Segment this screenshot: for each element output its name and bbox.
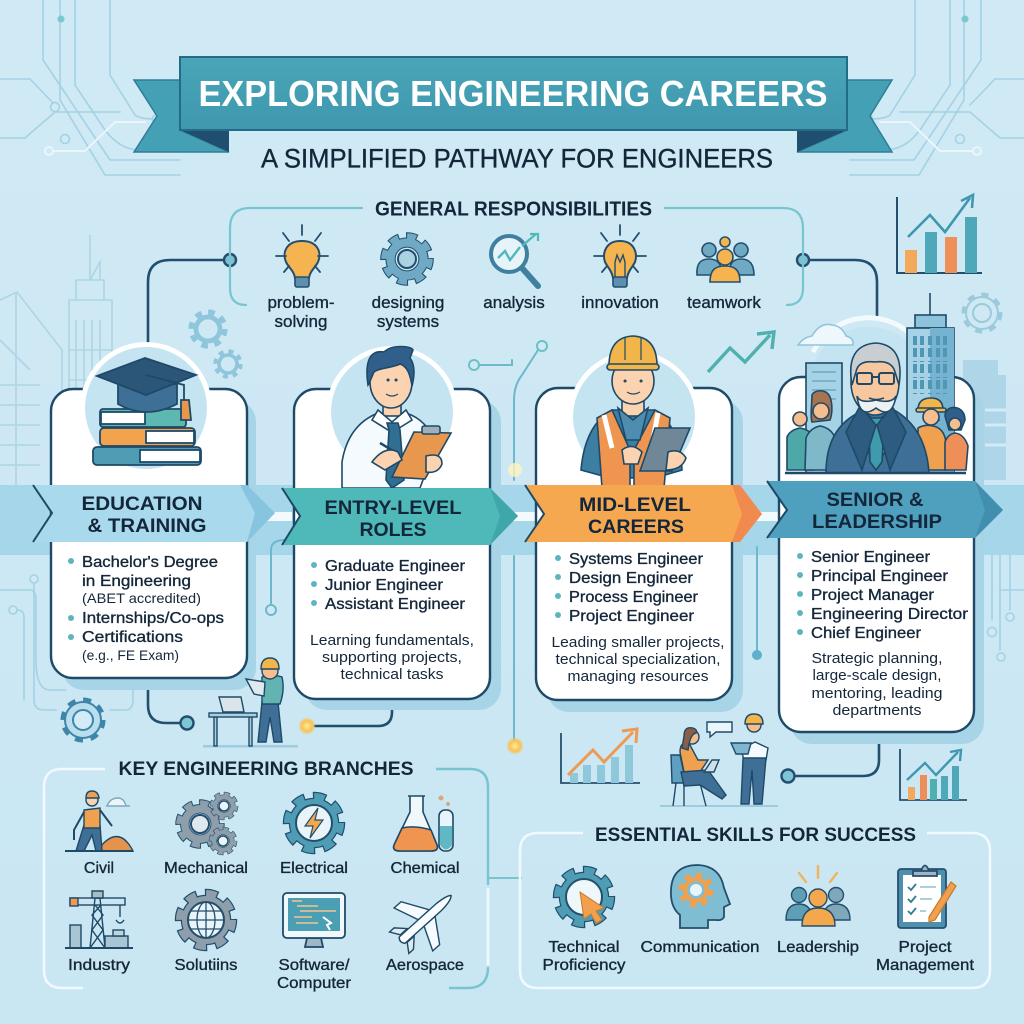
labels: skills: Technical	[548, 939, 620, 956]
labels: branches: Mechanical	[164, 860, 248, 877]
icon: problem-solving bulb	[276, 225, 328, 287]
labels: branches: Chemical	[390, 860, 460, 877]
text: senior details: mentoring, leading	[812, 686, 942, 702]
text: mid-level details: managing resources	[568, 669, 708, 685]
chart: top right	[897, 195, 982, 273]
trend arrow	[708, 332, 774, 372]
text: senior details: Principal Engineer	[811, 568, 949, 585]
banner: senior and leadership: SENIOR &	[826, 490, 924, 511]
text: entry-level details	[310, 558, 474, 683]
labels: branches: Solutiins	[174, 957, 238, 974]
connector lines	[148, 254, 879, 782]
text: senior details: departments	[832, 703, 922, 719]
text: senior details: Chief Engineer	[811, 625, 922, 642]
text: entry-level details: technical tasks	[340, 667, 444, 683]
icon: chemical	[394, 796, 453, 851]
text: senior details: Strategic planning,	[812, 651, 942, 667]
illustration: books and cap	[80, 342, 212, 474]
illustration: entry-level engineer	[326, 346, 458, 488]
small team	[787, 391, 968, 470]
text: mid-level details: Systems Engineer	[569, 551, 704, 568]
labels: branches: Electrical	[280, 860, 348, 877]
text: entry-level details: Learning fundamentals,	[310, 633, 474, 649]
text: education details: Internships/Co-ops	[82, 610, 224, 627]
subtitle: A SIMPLIFIED PATHWAY FOR ENGINEERS	[261, 144, 773, 174]
labels: responsibilities: teamwork	[687, 293, 761, 312]
icon: communication	[671, 865, 730, 928]
panel: mid-level card	[536, 388, 732, 700]
panel: general responsibilities	[230, 198, 803, 331]
banner: mid-level careers: CAREERS	[588, 517, 684, 538]
text: entry-level details: Junior Engineer	[325, 577, 444, 594]
background circuit lines	[0, 0, 1024, 710]
labels: skills: Management	[876, 957, 975, 974]
labels: responsibilities: analysis	[483, 293, 545, 312]
labels: skills: Leadership	[777, 939, 859, 956]
labels: branches: Aerospace	[386, 957, 464, 974]
banner: education and training	[33, 485, 275, 542]
icon: industry	[65, 891, 133, 948]
text: mid-level details: Project Engineer	[569, 608, 695, 625]
labels: responsibilities	[267, 293, 761, 331]
text: entry-level details: supporting projects,	[322, 650, 462, 666]
building left	[806, 363, 842, 473]
banner: senior and leadership	[767, 481, 1003, 538]
heading: essential skills: ESSENTIAL SKILLS FOR SUCCESS	[595, 824, 916, 846]
background gears	[191, 312, 241, 377]
icon: aerospace	[380, 874, 470, 964]
text: education details: Bachelor's Degree	[82, 554, 218, 571]
text: senior details: Senior Engineer	[811, 549, 931, 566]
labels: skills: Communication	[640, 939, 760, 956]
icon: analysis magnifier	[491, 234, 538, 286]
text: education details: (ABET accredited)	[82, 590, 201, 606]
labels: branches: Industry	[68, 957, 130, 974]
labels: skills	[542, 939, 975, 974]
text: mid-level details	[552, 551, 724, 685]
labels: responsibilities: problem-	[267, 293, 335, 312]
icon: teamwork people	[697, 237, 754, 282]
text: education details: Certifications	[82, 629, 183, 646]
chart: right bottom	[900, 749, 967, 800]
building right	[907, 293, 954, 473]
panel: education card	[51, 389, 247, 678]
banner: entry-level roles: ROLES	[360, 520, 426, 541]
banner: mid-level careers	[525, 485, 762, 542]
illustration: senior leader and team	[785, 293, 968, 473]
banner: mid-level careers: MID-LEVEL	[579, 495, 691, 516]
icon: civil	[65, 791, 133, 851]
panel: essential skills	[520, 824, 990, 988]
banner: education and training: & TRAINING	[88, 516, 206, 537]
text: mid-level details: technical specialization,	[556, 652, 720, 668]
icon: leadership	[786, 866, 850, 926]
icon: solutions	[180, 894, 232, 946]
text: senior details: large-scale design,	[812, 668, 942, 684]
background city right	[963, 360, 1006, 480]
progress band	[0, 485, 1024, 555]
text: mid-level details: Leading smaller projects,	[552, 635, 724, 651]
text: senior details: Engineering Director	[811, 606, 969, 623]
title: EXPLORING ENGINEERING CAREERS	[198, 73, 828, 114]
panel: senior card	[779, 377, 974, 732]
text: mid-level details: Design Engineer	[569, 570, 694, 587]
labels: responsibilities: systems	[377, 312, 439, 331]
illustration: engineer at desk	[203, 658, 298, 748]
labels: responsibilities: designing	[372, 293, 444, 312]
leader	[826, 343, 929, 473]
labels: branches: Computer	[277, 975, 352, 992]
background city left	[0, 235, 112, 485]
banner: entry-level roles	[282, 488, 518, 545]
gear icon bottom left	[63, 700, 103, 740]
banner	[134, 57, 892, 152]
icon: technical proficiency	[558, 871, 610, 923]
text: education details	[68, 554, 224, 663]
banner: education and training: EDUCATION	[82, 494, 202, 515]
icon: innovation bulb	[594, 225, 646, 287]
illustration: mid-level worker	[568, 336, 700, 488]
banner: entry-level roles: ENTRY-LEVEL	[324, 498, 462, 519]
labels: responsibilities: innovation	[581, 293, 659, 312]
banner: senior and leadership: LEADERSHIP	[812, 512, 942, 533]
gear icon top right	[964, 295, 1000, 331]
card shadows	[62, 388, 984, 744]
chart: center bottom	[561, 729, 640, 783]
heading: general responsibilities: GENERAL RESPONSIBILITIES	[375, 198, 652, 220]
text: mid-level details: Process Engineer	[569, 589, 699, 606]
text: entry-level details: Assistant Engineer	[325, 596, 466, 613]
heading: key engineering branches: KEY ENGINEERING BRANCHES	[118, 759, 414, 780]
labels: branches: Civil	[84, 860, 114, 877]
text: education details: in Engineering	[82, 573, 191, 590]
illustration: colleagues talking	[660, 714, 778, 807]
text: entry-level details: Graduate Engineer	[325, 558, 466, 575]
icon: software	[283, 893, 345, 947]
icon: electrical	[288, 797, 340, 849]
labels: responsibilities: solving	[275, 312, 327, 331]
icon: mechanical	[180, 794, 236, 853]
panel: key engineering branches	[44, 759, 522, 992]
labels: branches: Software/	[278, 957, 350, 974]
cloud	[798, 324, 853, 345]
text: education details: (e.g., FE Exam)	[82, 647, 179, 663]
text: senior details: Project Manager	[811, 587, 935, 604]
panel: entry-level card	[294, 389, 490, 699]
icon: designing systems gear	[385, 237, 429, 281]
labels: skills: Project	[898, 939, 952, 956]
labels: skills: Proficiency	[542, 957, 626, 974]
text: senior details	[797, 549, 969, 719]
icon: project management	[898, 866, 956, 928]
labels: branches	[68, 860, 464, 992]
